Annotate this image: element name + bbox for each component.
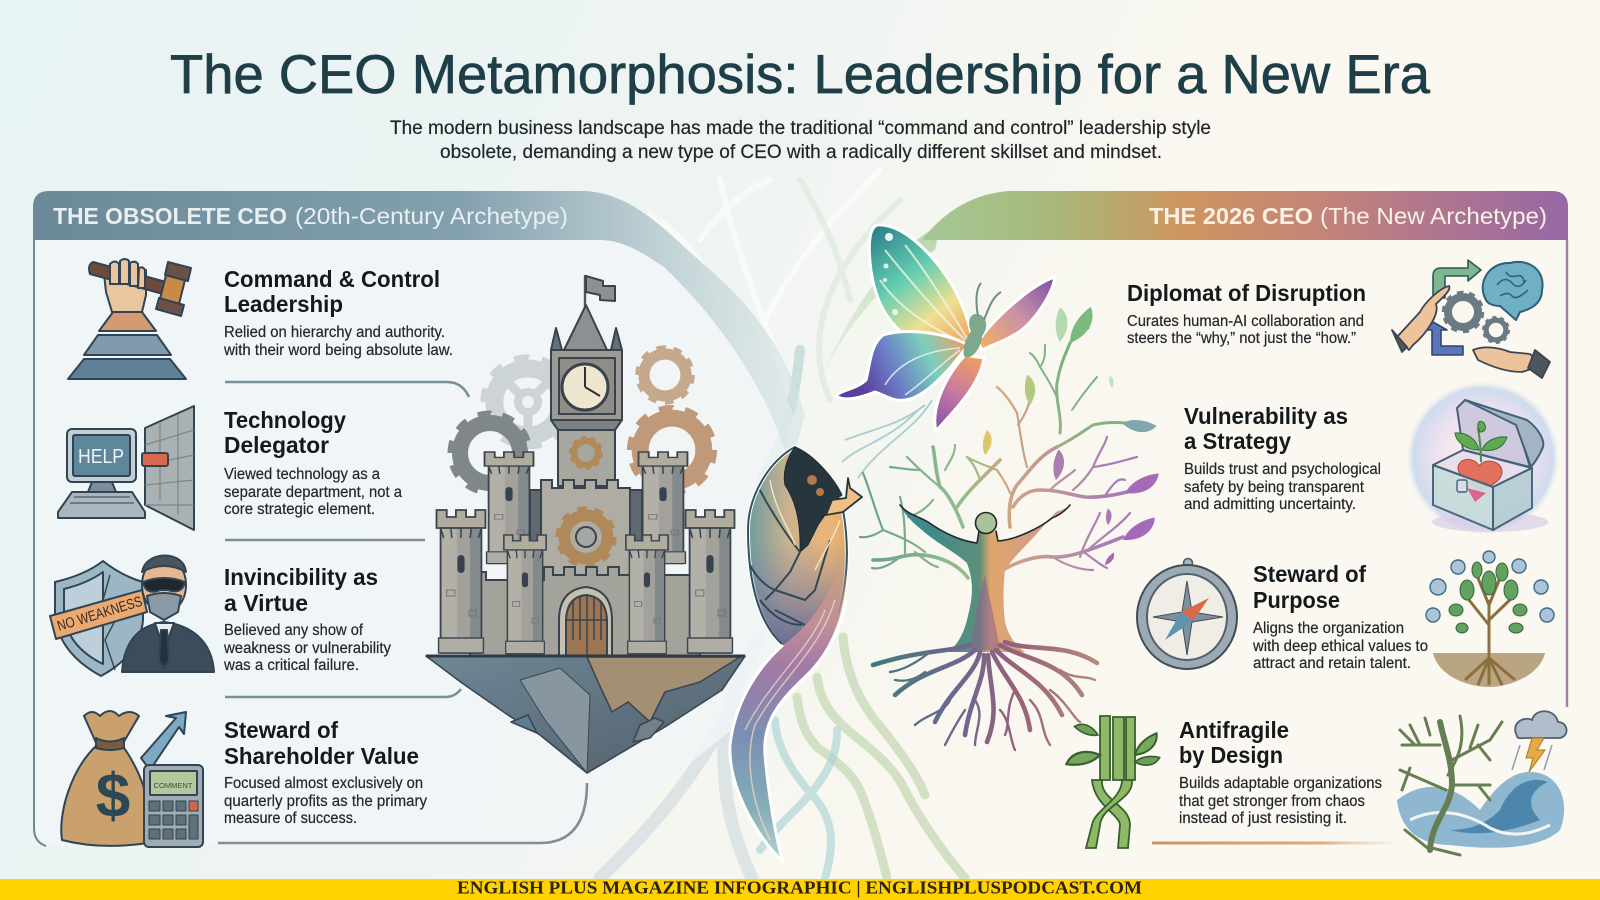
text: diplomat: Curates human-AI collaboration and bbox=[1127, 313, 1364, 330]
text: antifragile: that get stronger from chaos bbox=[1179, 793, 1365, 810]
text: invincibility: a Virtue bbox=[224, 590, 308, 616]
lower right wing bbox=[935, 355, 984, 431]
text: purpose: attract and retain talent. bbox=[1253, 655, 1411, 672]
lower left wing bbox=[836, 332, 968, 400]
text: shareholder value: quarterly profits as the primary bbox=[224, 793, 427, 810]
cocoon shell bbox=[748, 447, 847, 645]
panel border bbox=[1566, 240, 1568, 707]
text: purpose bbox=[1252, 561, 1428, 672]
icon label: no weakness: NO WEAKNESS bbox=[55, 594, 144, 635]
header subtitle: (The New Archetype) bbox=[1320, 203, 1547, 229]
upper left wing bbox=[869, 225, 972, 346]
text: vulnerability bbox=[1184, 403, 1381, 513]
icon label: help: HELP bbox=[78, 446, 124, 468]
text: purpose: Steward of bbox=[1253, 561, 1366, 587]
panel background bbox=[34, 240, 795, 845]
gate bbox=[559, 587, 612, 656]
title: The CEO Metamorphosis: Leadership for a New Era bbox=[170, 43, 1430, 105]
icon: computer and wall bbox=[58, 406, 194, 530]
clock tower bbox=[551, 275, 622, 486]
text: technology delegator: core strategic element. bbox=[224, 501, 375, 518]
panel: obsolete CEO bbox=[33, 191, 805, 847]
text: invincibility: was a critical failure. bbox=[223, 657, 359, 674]
butterfly bbox=[836, 225, 1055, 478]
panel border bbox=[34, 240, 46, 846]
header tail bbox=[815, 225, 940, 395]
background tree branches bbox=[600, 170, 965, 878]
text: shareholder value: Shareholder Value bbox=[224, 743, 419, 769]
text: invincibility bbox=[223, 564, 391, 674]
text: vulnerability: and admitting uncertainty. bbox=[1184, 496, 1356, 513]
text: invincibility: Believed any show of bbox=[224, 622, 364, 639]
text: antifragile: Antifragile bbox=[1179, 717, 1289, 743]
text: invincibility: weakness or vulnerability bbox=[223, 640, 391, 657]
header band bbox=[922, 191, 1568, 240]
text: vulnerability: a Strategy bbox=[1184, 428, 1291, 454]
text: vulnerability: Vulnerability as bbox=[1184, 403, 1348, 429]
person tree bbox=[860, 307, 1159, 750]
antennae bbox=[976, 283, 1001, 320]
icon label: dollar: $ bbox=[96, 762, 130, 831]
torn flap bbox=[826, 478, 862, 515]
text: technology delegator: Delegator bbox=[224, 432, 329, 458]
header title: THE OBSOLETE CEO bbox=[53, 203, 287, 229]
text: shareholder value bbox=[224, 717, 427, 827]
icon: hands gears brain bbox=[1392, 260, 1550, 378]
branches bbox=[873, 447, 1127, 578]
text: technology delegator: Technology bbox=[224, 407, 346, 433]
header band bbox=[33, 191, 805, 470]
ribbon edge bbox=[730, 600, 846, 862]
subtitle: The modern business landscape has made the traditional “command and control” leadership style bbox=[390, 117, 1211, 139]
icon: tree with values bbox=[1426, 551, 1554, 687]
text: command and control: Command & Control bbox=[224, 266, 440, 292]
footer banner: ENGLISH PLUS MAGAZINE INFOGRAPHIC | ENGLISHPLUSPODCAST.COM bbox=[457, 878, 1143, 898]
dividers bbox=[218, 382, 587, 843]
text: purpose: Purpose bbox=[1253, 587, 1340, 613]
cocoon and ribbon bbox=[730, 447, 862, 862]
text: purpose: with deep ethical values to bbox=[1252, 638, 1428, 655]
text: command and control: Leadership bbox=[224, 291, 343, 317]
icon: storm tree and wave bbox=[1397, 711, 1567, 855]
castle illustration bbox=[426, 275, 745, 773]
text: antifragile: by Design bbox=[1179, 742, 1283, 768]
text: command and control: Relied on hierarchy and authority. bbox=[224, 324, 445, 341]
text: shareholder value: Steward of bbox=[224, 717, 338, 743]
outer towers bbox=[437, 510, 485, 653]
text: technology delegator: Viewed technology as a bbox=[224, 466, 380, 483]
footer banner bbox=[0, 878, 1600, 900]
text: diplomat bbox=[1127, 280, 1366, 347]
text: invincibility: Invincibility as bbox=[224, 564, 378, 590]
header title: THE 2026 CEO bbox=[1149, 203, 1313, 229]
leaves bbox=[975, 307, 1159, 565]
front towers bbox=[504, 535, 546, 654]
body bbox=[964, 314, 986, 357]
icon: shield and masked man bbox=[50, 556, 214, 676]
roots bbox=[873, 642, 1097, 742]
gears behind castle bbox=[452, 348, 712, 491]
text: vulnerability: safety by being transparent bbox=[1184, 479, 1365, 496]
subtitle bbox=[390, 117, 1211, 163]
text: antifragile bbox=[1179, 717, 1382, 827]
icon: money bag and calculator bbox=[61, 711, 203, 847]
text: purpose: Aligns the organization bbox=[1253, 620, 1404, 637]
text: shareholder value: Focused almost exclusively on bbox=[224, 775, 423, 792]
bottom divider bbox=[1152, 842, 1392, 844]
person figure bbox=[900, 505, 1070, 652]
text: command and control bbox=[223, 266, 453, 359]
text: technology delegator: separate department, not a bbox=[224, 484, 402, 501]
icon: chest with heart bbox=[1407, 382, 1559, 534]
floating rock bbox=[426, 656, 745, 773]
upper right wing bbox=[978, 277, 1055, 350]
icon: compass bbox=[1137, 558, 1237, 669]
text: command and control: with their word being absolute law. bbox=[223, 342, 453, 359]
streaks bbox=[842, 400, 932, 478]
central keep bbox=[530, 480, 642, 655]
ribbon bbox=[730, 545, 847, 862]
cocoon interior bbox=[784, 447, 842, 552]
panel: 2026 CEO bbox=[815, 191, 1568, 855]
icon: bamboo bbox=[1066, 716, 1161, 848]
icon: gavel and pyramid bbox=[68, 259, 191, 379]
icon label: calculator display: COMMENT bbox=[154, 781, 193, 790]
text: antifragile: Builds adaptable organizations bbox=[1179, 775, 1382, 792]
subtitle: obsolete, demanding a new type of CEO with a radically different skillset and mindset. bbox=[440, 141, 1162, 163]
text: antifragile: instead of just resisting it. bbox=[1179, 810, 1347, 827]
text: diplomat: Diplomat of Disruption bbox=[1127, 280, 1366, 306]
text: diplomat: steers the “why,” not just the “how.” bbox=[1127, 330, 1356, 347]
text: vulnerability: Builds trust and psychological bbox=[1184, 461, 1381, 478]
cocoon veins bbox=[750, 490, 830, 625]
header subtitle: (20th-Century Archetype) bbox=[295, 203, 568, 229]
text: technology delegator bbox=[224, 407, 402, 518]
main wall bbox=[470, 567, 700, 656]
text: shareholder value: measure of success. bbox=[224, 810, 357, 827]
back towers bbox=[485, 452, 533, 564]
